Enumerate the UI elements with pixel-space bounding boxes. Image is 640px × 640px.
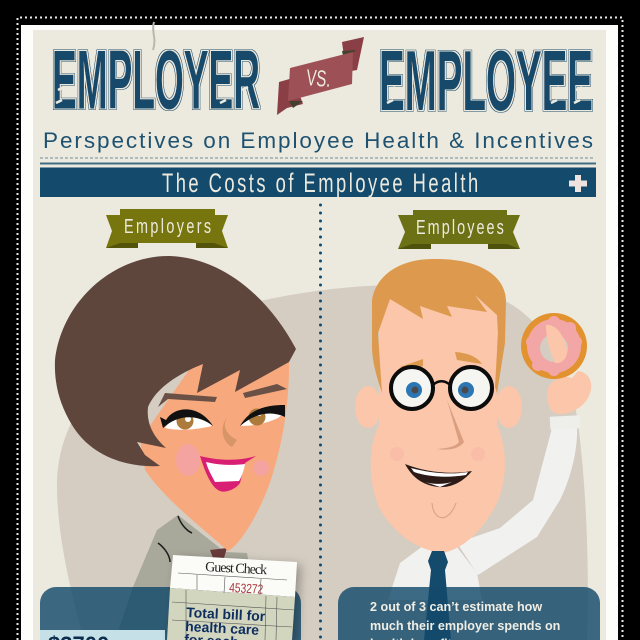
check heading: Guest Check <box>205 560 267 578</box>
title: Employer notches <box>56 87 248 103</box>
eyes <box>165 414 212 430</box>
figure: employee man <box>355 259 591 640</box>
background oval <box>57 285 588 640</box>
guest check <box>167 555 297 640</box>
tie <box>424 551 451 640</box>
icon: donut <box>521 313 587 379</box>
callout text: 2 out of 3 can’t estimate how <box>370 600 542 614</box>
hand <box>547 371 591 414</box>
check lines <box>172 573 295 640</box>
jacket <box>115 515 262 640</box>
cheeks <box>390 447 404 461</box>
cheeks <box>176 444 200 476</box>
check number: 453272 <box>229 581 264 597</box>
guest check: health care <box>185 618 260 638</box>
shirt <box>388 542 482 600</box>
face <box>140 350 289 551</box>
icon: plus <box>569 175 587 192</box>
ribbon: employers <box>106 209 228 248</box>
chin <box>432 503 456 518</box>
mouth <box>200 456 256 492</box>
section heading: The Costs of Employee Health <box>162 167 478 198</box>
eyebrows <box>158 393 217 407</box>
ribbon: employees <box>398 210 520 249</box>
cuff <box>550 415 580 430</box>
nose <box>437 400 464 450</box>
employees label: Employees <box>416 216 504 239</box>
head <box>371 295 505 553</box>
check text: Total bill for <box>186 604 266 624</box>
neck <box>425 525 455 556</box>
section banner <box>40 167 596 198</box>
hair <box>372 259 506 393</box>
title: Employee notches <box>387 87 582 103</box>
subtitle: Perspectives on Employee Health & Incentives <box>43 128 593 153</box>
callout: employer <box>40 587 301 640</box>
vs label: VS. <box>306 65 331 93</box>
figure: employer woman <box>55 256 296 640</box>
raised arm <box>457 428 577 575</box>
paper crease <box>153 22 154 50</box>
employers label: Employers <box>124 215 211 238</box>
stat box <box>40 630 165 640</box>
hair <box>55 256 296 466</box>
mouth <box>405 464 472 487</box>
ears <box>355 386 381 428</box>
receipt shadow <box>171 558 301 640</box>
center dotted divider <box>319 205 322 640</box>
glasses <box>391 367 433 409</box>
callout text: much their employer spends on <box>370 619 560 633</box>
eyebrows <box>400 352 482 370</box>
tie <box>210 548 227 558</box>
title: Employer: EMPLOYER <box>52 33 260 126</box>
vs ribbon <box>277 37 364 115</box>
nose <box>223 417 237 447</box>
callout: employee <box>338 587 600 640</box>
